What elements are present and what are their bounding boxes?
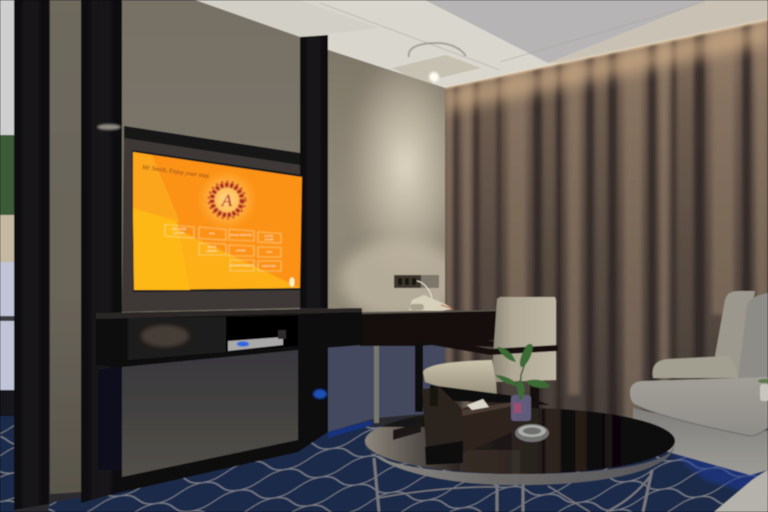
curtain [445,20,768,430]
telephone on desk [409,295,453,311]
armchair arm [653,356,738,378]
ceiling spotlight [429,72,439,82]
menu labels [172,227,276,268]
warm cove light [445,20,768,88]
armchair cushion [630,377,768,436]
menu labels: LIBRARY [206,249,218,253]
console glass door [128,317,226,360]
chair seat [423,360,497,398]
menu labels: ENTERTAINMENT [230,264,254,268]
menu labels: GUIDE [265,238,274,242]
console niche [226,316,298,352]
wall socket panel [394,275,439,298]
desk [360,310,555,412]
left narrow wall panel [50,0,81,494]
menu labels: MOVIE [207,245,217,249]
remote holder [422,387,463,465]
crest logo: A [221,191,233,210]
menu labels: DINING [236,248,246,252]
menu labels: LETTER [174,231,184,235]
lower right wall panel [328,345,445,438]
desk chair [420,297,558,410]
carpet floor [0,416,768,512]
vase with plant [495,344,550,421]
table legs [374,458,652,512]
lower wall below console [122,342,298,492]
table rim [365,442,675,485]
socket strip reflection [393,423,421,440]
armchair [630,291,768,475]
ceiling vent ring [409,43,466,57]
glass tabletop [365,408,675,474]
adjoining room seen at far left [0,0,16,416]
menu labels: WELCOME [172,227,186,231]
chair arm [420,336,558,355]
greeting text: Mr Smith, Enjoy your stay. [141,164,211,180]
tissue box [462,399,513,453]
menu labels: ROOM SERVICE [230,233,252,237]
dark pillar far left [14,0,49,510]
crest logo [208,182,246,218]
dark pillar beside screen [81,0,122,503]
tabletop reflections [375,405,612,475]
second sofa corner [714,470,768,512]
set top box [228,330,286,351]
screen corner oval [289,277,295,287]
dark pillar right of screen [298,35,328,452]
media console shelf [96,308,362,367]
menu labels: WEATHER [262,264,276,268]
television with welcome screen [132,150,303,292]
armchair base [633,408,768,475]
ceiling access panel [392,55,481,86]
plant leaves [495,344,550,400]
ceiling [195,0,768,88]
screen recess frame [122,126,300,312]
menu labels: HOTEL [264,234,274,238]
menu buttons [165,224,281,271]
wall panel right of screen [327,50,446,313]
cushion pillow [760,384,768,401]
armchair wing back [715,291,755,378]
screen background [133,152,302,290]
warm light wash [445,22,768,112]
upper wall behind screen [122,0,300,370]
glass ashtray [515,424,549,442]
skirting [122,440,298,492]
coffee table [365,405,675,512]
menu labels: SPA [209,232,215,236]
chair back [493,297,556,382]
menu labels: TAXI [266,250,272,254]
